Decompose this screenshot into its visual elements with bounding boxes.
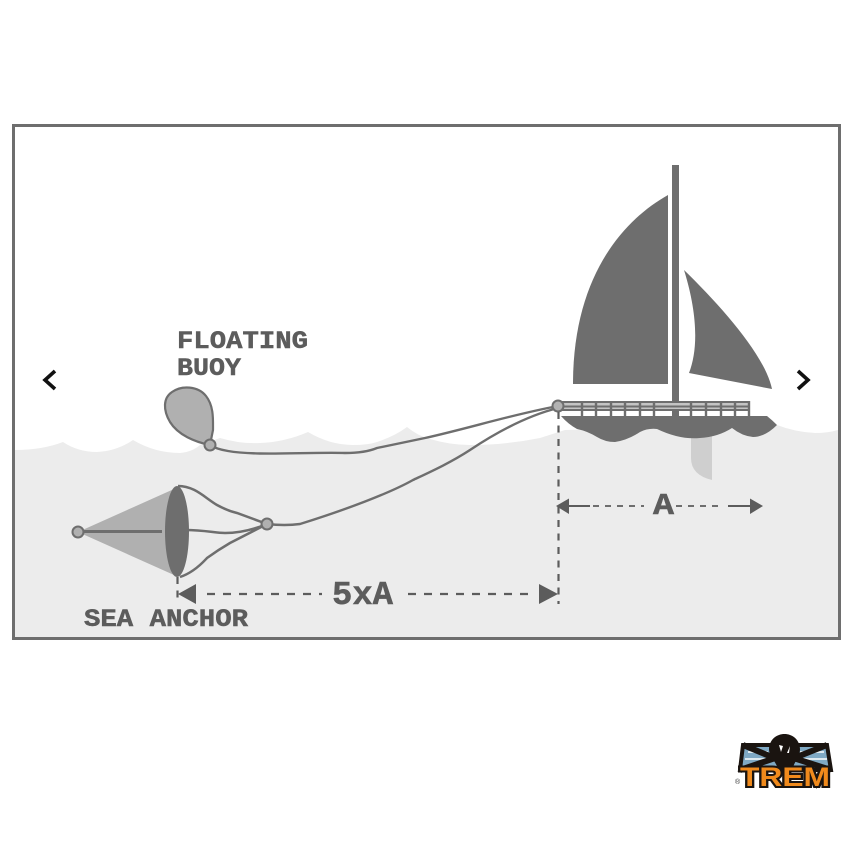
jib sail bbox=[684, 270, 772, 389]
rudder bbox=[691, 436, 712, 480]
label: floating buoy bbox=[177, 327, 308, 383]
logo backing bbox=[740, 745, 831, 770]
bow attachment point bbox=[552, 400, 564, 412]
label: sea anchor: SEA ANCHOR bbox=[84, 605, 248, 634]
center line bbox=[78, 530, 162, 533]
tether to floating buoy bbox=[210, 406, 558, 454]
logo: TREM bbox=[735, 734, 831, 792]
label: floating buoy: FLOATING bbox=[177, 327, 308, 356]
dimension arrow: A bbox=[556, 489, 763, 524]
dashed guide lines bbox=[178, 412, 558, 604]
floating buoy bbox=[165, 387, 216, 450]
water bbox=[15, 425, 838, 637]
registered mark: ® bbox=[735, 778, 741, 786]
logo wordmark: TREM bbox=[740, 762, 830, 792]
octopus eyes bbox=[779, 745, 790, 753]
mainsail bbox=[573, 195, 668, 384]
logo stripes bbox=[745, 752, 827, 759]
dimension arrow: A: A bbox=[653, 489, 674, 524]
dimension arrow: 5xA bbox=[178, 577, 558, 614]
deck railing bbox=[562, 401, 750, 416]
sailboat bbox=[561, 165, 777, 442]
next arrow bbox=[798, 371, 808, 389]
mast bbox=[672, 165, 679, 417]
octopus legs bbox=[740, 745, 831, 770]
panel border bbox=[14, 126, 840, 638]
cone bbox=[78, 489, 174, 575]
previous arrow bbox=[45, 371, 55, 389]
end rings bbox=[72, 526, 84, 538]
sea anchor bbox=[72, 486, 272, 577]
tether to sea anchor bbox=[267, 408, 558, 525]
label: floating buoy: BUOY bbox=[177, 354, 241, 383]
shroud lines bbox=[178, 486, 267, 577]
hull bbox=[561, 416, 777, 442]
octopus head bbox=[769, 734, 800, 772]
disc bbox=[165, 486, 189, 577]
panel: diagram background bbox=[14, 126, 840, 638]
dimension arrow: 5xA: 5xA bbox=[332, 577, 393, 614]
